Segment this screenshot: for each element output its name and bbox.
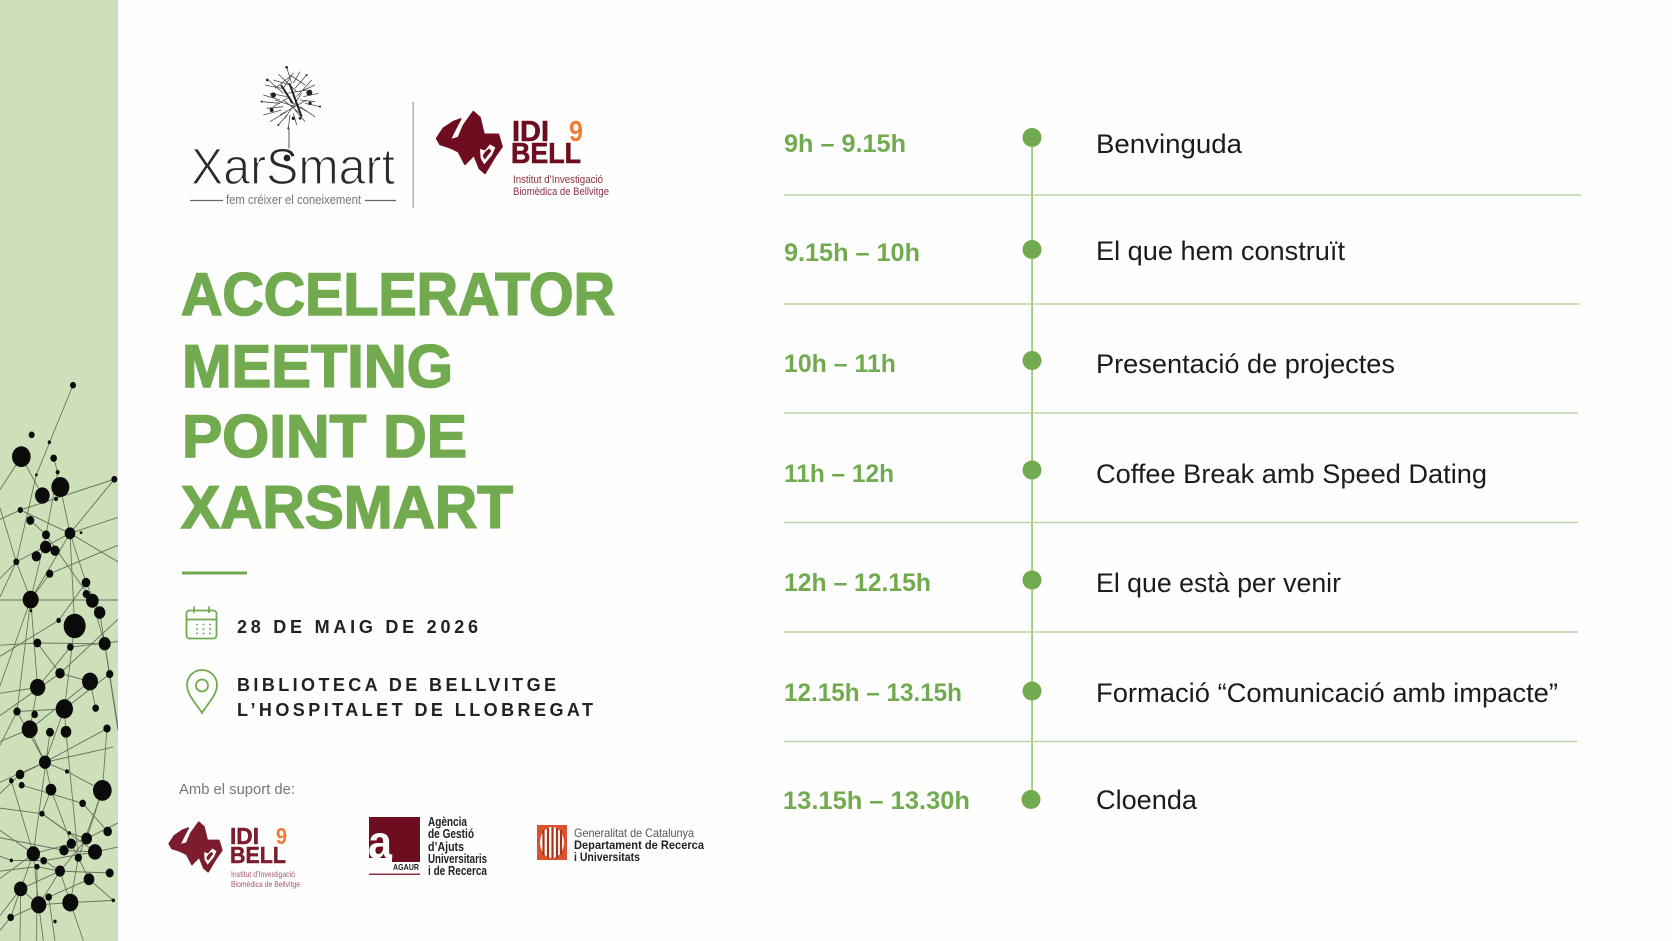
row: Formació [784, 678, 1558, 708]
row: Formació: 12.15h – 13.15h [784, 679, 962, 707]
wordmark: IDI [230, 823, 259, 849]
wordmark: XarSmart [191, 138, 395, 195]
agency name: de Gestió [428, 827, 474, 841]
wordmark: IDI [512, 116, 549, 148]
institute name: Biomèdica de Bellvitge [513, 186, 609, 198]
row: Cloenda [783, 785, 1198, 815]
logo: IDIBELL support [169, 822, 300, 889]
department name [574, 826, 704, 864]
location: BIBLIOTECA DE BELLVITGE [237, 675, 556, 695]
logo: IDIBELL header [437, 112, 609, 198]
institute name: Biomèdica de Bellvitge [231, 879, 300, 889]
tagline: fem créixer el coneixement [226, 192, 361, 207]
row: Benvinguda: Benvinguda [1096, 129, 1243, 159]
institute name [231, 869, 300, 889]
row: Coffee Break: 11h – 12h [784, 460, 894, 488]
panel: green sidebar with network [0, 0, 118, 941]
institute name [513, 174, 609, 198]
agency name: Agència [428, 815, 468, 829]
row: El que està per venir [784, 568, 1341, 598]
agenda timeline [783, 128, 1581, 815]
icon: calendar [186, 606, 216, 638]
logo: XarSmart [190, 66, 396, 207]
agency name: Universitaris [428, 852, 487, 866]
row: Formació: Formació “Comunicació amb impacte” [1096, 678, 1558, 708]
department name: i Universitats [574, 850, 640, 864]
network illustration [0, 382, 118, 941]
row: Coffee Break: Coffee Break amb Speed Dating [1096, 459, 1487, 489]
row: Cloenda: 13.15h – 13.30h [783, 787, 970, 815]
letter a: a [368, 816, 392, 868]
support label: Amb el suport de: [179, 782, 295, 798]
wordmark [230, 823, 286, 868]
row: Coffee Break [784, 459, 1487, 489]
wordmark: BELL [230, 842, 286, 868]
row: El que està per venir: El que està per venir [1096, 568, 1341, 598]
logo divider [412, 102, 414, 208]
row: Presentació de projectes: 10h – 11h [784, 350, 896, 378]
row: Presentació de projectes: Presentació de projectes [1096, 349, 1395, 379]
institute name: Institut d’Investigació [231, 869, 295, 879]
orange nine: 9 [276, 823, 287, 849]
AGAUR mark: AGAUR [393, 862, 419, 872]
title: ACCELERATOR [181, 261, 615, 328]
wordmark: BELL [511, 138, 581, 170]
agency name [428, 815, 488, 878]
logo: Generalitat [537, 825, 704, 864]
title rule [182, 572, 247, 574]
row: El que està per venir: 12h – 12.15h [784, 569, 931, 597]
agency name: d’Ajuts [428, 840, 464, 854]
row: El que hem construït: El que hem construït [1096, 236, 1345, 266]
department name: Generalitat de Catalunya [574, 826, 694, 840]
icon: IDIBELL small symbol [169, 822, 222, 872]
row: Cloenda: Cloenda [1096, 785, 1198, 815]
logo: AGAUR [368, 815, 488, 878]
row: Benvinguda: 9h – 9.15h [784, 130, 906, 158]
row: El que hem construït [784, 236, 1345, 267]
title: POINT DE [182, 403, 467, 470]
tree scribble icon [261, 66, 321, 161]
institute name: Institut d’Investigació [513, 174, 603, 186]
wordmark [511, 116, 581, 170]
row: El que hem construït: 9.15h – 10h [784, 239, 920, 267]
icon: IDIBELL symbol [437, 112, 502, 173]
location: L’HOSPITALET DE LLOBREGAT [237, 700, 593, 720]
location [237, 675, 593, 720]
department name: Departament de Recerca [574, 838, 704, 852]
icon: location pin [187, 670, 217, 713]
title [181, 261, 615, 541]
orange nine: 9 [569, 116, 583, 148]
red square [369, 817, 420, 862]
title: MEETING [182, 333, 453, 400]
date: 28 DE MAIG DE 2026 [237, 617, 478, 637]
timeline axis [1031, 137, 1033, 800]
icon: senyera shield [537, 825, 567, 860]
title: XARSMART [181, 474, 513, 541]
row: Benvinguda [784, 128, 1243, 159]
row: Presentació de projectes [784, 349, 1395, 379]
agency name: i de Recerca [428, 864, 488, 878]
